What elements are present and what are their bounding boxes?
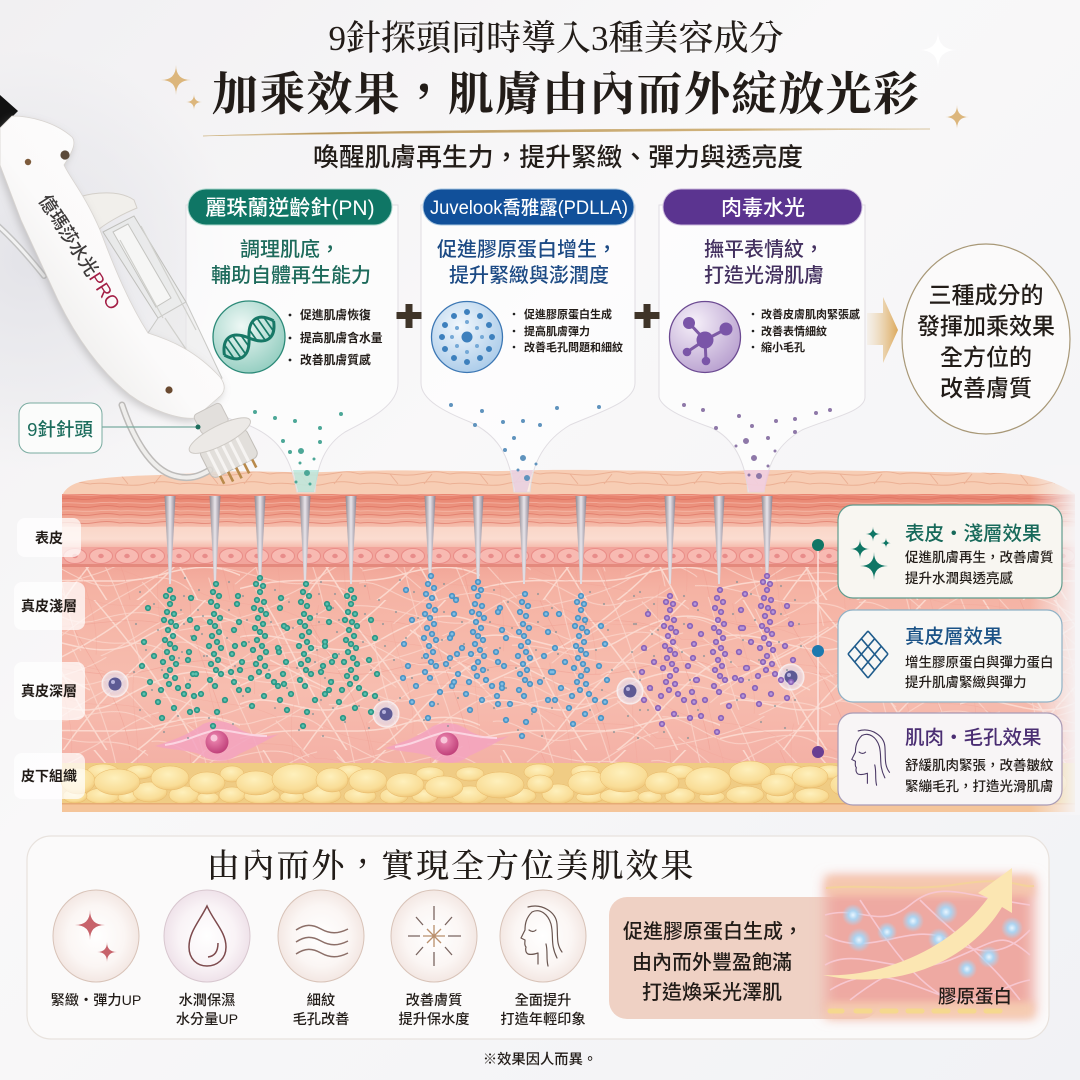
label: 9-needle tip: 9針針頭 xyxy=(27,419,93,440)
card heading: 提升緊緻與澎潤度 xyxy=(449,264,609,287)
panel heading: 由內而外，實現全方位美肌效果 xyxy=(207,848,695,885)
icon: collagen sphere xyxy=(432,302,502,372)
collagen callout xyxy=(609,868,1034,1019)
benefit list: 改善表情細紋 xyxy=(761,324,827,338)
layer label: upper dermis: 真皮淺層 xyxy=(21,598,77,614)
dermis with fibres xyxy=(62,567,1075,767)
layer label: subcutaneous xyxy=(14,753,85,799)
label: 9-needle tip xyxy=(19,403,200,453)
right edge fade xyxy=(1030,465,1080,815)
icon: collagen mesh xyxy=(848,631,888,678)
syringe tube xyxy=(103,216,186,318)
basal cell row xyxy=(62,547,1075,565)
benefit: firmness: 緊緻・彈力UP xyxy=(51,993,141,1009)
panel: botulinum card xyxy=(659,189,865,492)
fibroblast cells xyxy=(155,721,509,763)
gold rule xyxy=(203,129,930,136)
benefit list: 改善毛孔問題和細紋 xyxy=(524,340,623,354)
title line 2: 加乘效果，肌膚由內而外綻放光彩 xyxy=(212,69,920,120)
card outline with funnel xyxy=(186,205,398,492)
benefit: hydration: 水潤保濕 xyxy=(179,992,235,1009)
effect card: epidermis xyxy=(838,505,1062,598)
nine-needle tip head xyxy=(176,393,272,494)
benefit list: 改善肌膚質感 xyxy=(300,353,371,367)
main body xyxy=(0,116,224,418)
benefit list: 改善皮膚肌肉緊張感 xyxy=(761,307,860,321)
body details xyxy=(25,150,173,394)
layer label: deep dermis xyxy=(14,662,85,720)
collagen callout: 由內而外豐盈飽滿 xyxy=(632,951,792,974)
card heading: 打造光滑肌膚 xyxy=(704,264,824,287)
benefit: fine lines: 毛孔改善 xyxy=(293,1012,349,1028)
collagen callout: 促進膠原蛋白生成， xyxy=(623,920,803,943)
benefit list: 促進肌膚恢復 xyxy=(300,308,371,322)
card outline with funnel xyxy=(421,205,635,492)
panel: Juvelook card: Juvelook喬雅露(PDLLA) xyxy=(430,197,628,219)
card heading: 撫平表情紋， xyxy=(704,238,824,261)
icon: face profile xyxy=(852,730,889,785)
card outline with funnel xyxy=(659,205,865,492)
effect card: dermis: 真皮層效果 xyxy=(905,626,1003,648)
benefit list: 縮小毛孔 xyxy=(761,340,805,354)
collagen illustration: 膠原蛋白 xyxy=(938,986,1012,1007)
pill header xyxy=(663,189,862,225)
benefit list: 提高肌膚彈力 xyxy=(524,324,590,338)
funnel droplets xyxy=(255,405,830,484)
benefit: fine lines: 細紋 xyxy=(307,992,335,1009)
benefit: youthful look xyxy=(500,890,586,1028)
arrow to summary xyxy=(867,297,898,363)
layer label: deep dermis: 真皮深層 xyxy=(21,683,77,699)
summary ellipse xyxy=(902,244,1070,434)
effect card: dermis: 增生膠原蛋白與彈力蛋白 xyxy=(905,654,1054,670)
summary ellipse: 全方位的 xyxy=(940,344,1032,370)
skin cross-section illustration xyxy=(61,465,1080,815)
effect card: dermis: 提升肌膚緊緻與彈力 xyxy=(905,674,1026,690)
effect card: muscle and pores: 肌肉・毛孔效果 xyxy=(905,727,1042,749)
brand text on body: 億瑪莎水光PRO xyxy=(35,191,124,313)
card heading xyxy=(437,238,617,287)
blue PDLLA particles xyxy=(403,576,607,736)
card heading: 促進膠原蛋白增生， xyxy=(437,238,617,261)
benefit list: 促進膠原蛋白生成 xyxy=(524,307,612,321)
subcutaneous fat xyxy=(61,761,1075,804)
benefit list xyxy=(513,307,623,354)
layer label: epidermis: 表皮 xyxy=(35,530,63,546)
plus sign 2 xyxy=(634,304,660,328)
purple botulinum particles xyxy=(642,576,793,732)
layer label: subcutaneous: 皮下組織 xyxy=(21,768,77,784)
benefit: firmness xyxy=(51,890,141,1009)
effect card: epidermis: 提升水潤與透亮感 xyxy=(905,570,1013,586)
effect card: dermis xyxy=(838,610,1062,702)
effect card: muscle and pores xyxy=(838,713,1062,805)
benefit: hydration xyxy=(164,890,250,1028)
icon: sparkles xyxy=(850,526,891,580)
effect card: epidermis: 表皮・淺層效果 xyxy=(905,523,1042,545)
icon: gold sparkles xyxy=(161,31,969,129)
effect card: muscle and pores: 緊繃毛孔，打造光滑肌膚 xyxy=(905,778,1054,794)
benefit: skin texture: 提升保水度 xyxy=(399,1012,469,1028)
effect card: epidermis: 促進肌膚再生，改善膚質 xyxy=(905,549,1054,565)
pill header xyxy=(423,189,634,225)
icon: molecule xyxy=(670,302,740,372)
card heading xyxy=(211,238,371,287)
card heading: 輔助自體再生能力 xyxy=(211,264,371,287)
benefit list xyxy=(289,308,383,367)
footnote: ※效果因人而異。 xyxy=(483,1051,597,1068)
card heading: 調理肌底， xyxy=(240,238,340,261)
device: mesotherapy handpiece xyxy=(0,95,272,494)
benefit: youthful look: 打造年輕印象 xyxy=(500,1011,586,1028)
panel: Juvelook card xyxy=(421,189,635,492)
panel: PN card xyxy=(186,189,398,492)
plus sign 1 xyxy=(396,304,422,328)
layer label: upper dermis xyxy=(14,582,85,630)
benefit: skin texture: 改善膚質 xyxy=(406,992,462,1009)
benefit: skin texture xyxy=(391,890,477,1028)
depth connector xyxy=(812,539,824,758)
summary ellipse: 發揮加乘效果 xyxy=(917,313,1055,339)
black cable end xyxy=(0,95,18,128)
epidermis strata xyxy=(62,494,1075,527)
tiny scattered particles xyxy=(134,578,801,738)
cables xyxy=(0,224,210,478)
card heading xyxy=(704,238,824,287)
benefit list: 提高肌膚含水量 xyxy=(300,331,383,345)
summary ellipse: 三種成分的 xyxy=(928,282,1044,308)
pill header xyxy=(188,189,392,225)
icon: DNA xyxy=(213,301,285,373)
syringe collar xyxy=(79,193,137,230)
collagen callout: 打造煥采光澤肌 xyxy=(642,981,782,1004)
summary ellipse: 改善膚質 xyxy=(940,375,1032,401)
collagen illustration xyxy=(823,868,1034,1018)
syringe cone xyxy=(148,302,222,405)
bottom skin band xyxy=(62,803,1075,812)
panel: botulinum card: 肉毒水光 xyxy=(721,197,805,220)
title line 1: 9針探頭同時導入3種美容成分 xyxy=(328,19,784,58)
subtitle: 喚醒肌膚再生力，提升緊緻、彈力與透亮度 xyxy=(313,143,803,172)
needles xyxy=(164,496,772,584)
benefit: fine lines xyxy=(278,890,364,1028)
teal PN particles xyxy=(142,578,377,726)
benefit list xyxy=(752,307,860,354)
layer label: epidermis xyxy=(17,518,81,557)
heading block xyxy=(203,19,930,172)
panel: overall benefits xyxy=(27,836,1049,1039)
panel: PN card: 麗珠蘭逆齡針(PN) xyxy=(205,197,375,220)
skin surface layer xyxy=(62,470,1075,500)
rising arrow xyxy=(823,868,1012,980)
immune cells xyxy=(102,664,804,727)
benefit: youthful look: 全面提升 xyxy=(515,993,571,1009)
benefit: hydration: 水分量UP xyxy=(176,1012,238,1028)
effect card: muscle and pores: 舒緩肌肉緊張，改善皺紋 xyxy=(905,757,1054,773)
